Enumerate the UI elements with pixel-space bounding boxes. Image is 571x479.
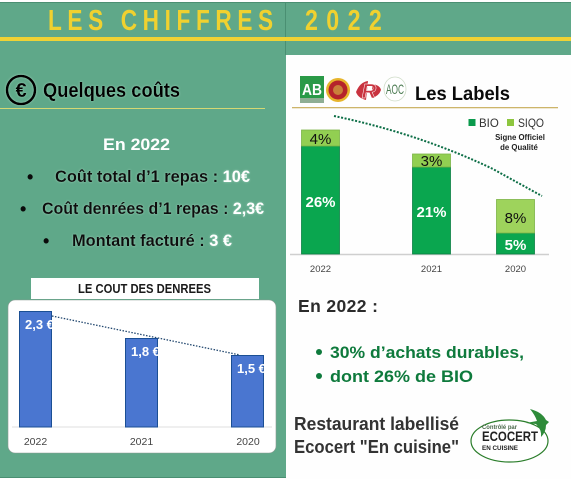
icon: ecocert logo: EN CUISINE: [482, 445, 519, 452]
legend: BIO: [479, 118, 499, 130]
legend: [468, 118, 544, 130]
bar 2020: [496, 200, 534, 254]
bar 2020: 5%: [505, 237, 526, 254]
text: restaurant labellisé: Restaurant labellisé: [294, 414, 459, 434]
bullet: invoiced amount: Montant facturé : 3 €: [72, 232, 232, 250]
bullet: food cost: Coût denrées d’1 repas : 2,3€: [42, 200, 264, 218]
bar 2022: [20, 312, 54, 427]
bar 2021: [412, 153, 450, 254]
bullet: food cost: •: [20, 199, 26, 219]
bar 2021: 1,8 €: [131, 344, 160, 359]
bar 2022: [302, 130, 340, 254]
bullet: sustainable purchases: 30% d’achats durables,: [330, 343, 524, 362]
icon: ecocert logo: [471, 409, 549, 462]
bar 2021: 3%: [421, 153, 442, 170]
stacked bar chart: labels: [290, 116, 549, 275]
bar 2021: [126, 338, 160, 427]
bullet: invoiced amount: •: [43, 231, 49, 251]
bullet: total meal cost: Coût total d’1 repas : 10€: [55, 168, 250, 186]
bullet: total meal cost: •: [27, 167, 33, 187]
axis labels: 2020: [236, 436, 260, 448]
text block: costs: [20, 136, 264, 251]
bar 2022: 26%: [305, 194, 336, 211]
axis labels: [24, 436, 260, 448]
trend line: [334, 116, 542, 196]
icon: Label Rouge: R: [362, 81, 377, 103]
axis labels: 2022: [24, 436, 47, 448]
subheading: en 2022: En 2022: [103, 136, 170, 154]
divider: [292, 107, 558, 108]
heading: les labels: Les Labels: [415, 83, 510, 105]
text: restaurant labellisé: [294, 414, 459, 457]
icon: euro coin: [7, 76, 35, 104]
legend: SIQO: [518, 118, 544, 130]
icon: AOC label: [384, 77, 406, 101]
icon: AOC label: AOC: [386, 81, 404, 97]
bullet list: purchases: [316, 343, 524, 386]
text: en 2022: En 2022 :: [298, 296, 378, 316]
bar 2022: 4%: [310, 131, 331, 148]
bar chart: food cost: [8, 300, 276, 453]
text: restaurant labellisé: Ecocert "En cuisine": [294, 437, 459, 457]
icon: AB label: [300, 76, 324, 103]
trend line: [52, 316, 240, 355]
bar 2020: 8%: [505, 210, 526, 227]
bar 2021: 21%: [416, 204, 447, 221]
title year: 2022: [305, 3, 390, 37]
icon: ecocert logo: Contrôlé par: [482, 424, 517, 431]
note: signe officiel de qualité: [495, 133, 545, 152]
panel: left costs panel: [0, 2, 286, 477]
heading: quelques coûts: Quelques coûts: [43, 80, 180, 102]
note: signe officiel de qualité: Signe Officiel: [495, 133, 545, 142]
title: LES CHIFFRES: [48, 3, 279, 37]
note: signe officiel de qualité: de Qualité: [500, 143, 539, 152]
icon: ecocert logo: ECOCERT: [482, 428, 538, 444]
bullet: organic: dont 26% de BIO: [330, 367, 473, 386]
icon: AB label: AB: [302, 82, 322, 99]
axis labels: 2020: [505, 264, 526, 275]
icon: Label Rouge: [355, 79, 381, 103]
chart title: le cout des denrees: LE COUT DES DENREES: [78, 282, 211, 296]
icon: AOP label: [326, 78, 350, 102]
icon: euro coin: €: [15, 80, 27, 102]
bar 2020: [232, 356, 266, 427]
axis labels: [310, 264, 526, 275]
axis labels: 2022: [310, 264, 331, 275]
axis labels: 2021: [421, 264, 442, 275]
chart title: le cout des denrees: [31, 278, 259, 299]
bar 2020: 1,5 €: [237, 361, 266, 376]
axis labels: 2021: [130, 436, 153, 448]
divider: [0, 108, 265, 109]
bar 2022: 2,3 €: [25, 317, 54, 332]
